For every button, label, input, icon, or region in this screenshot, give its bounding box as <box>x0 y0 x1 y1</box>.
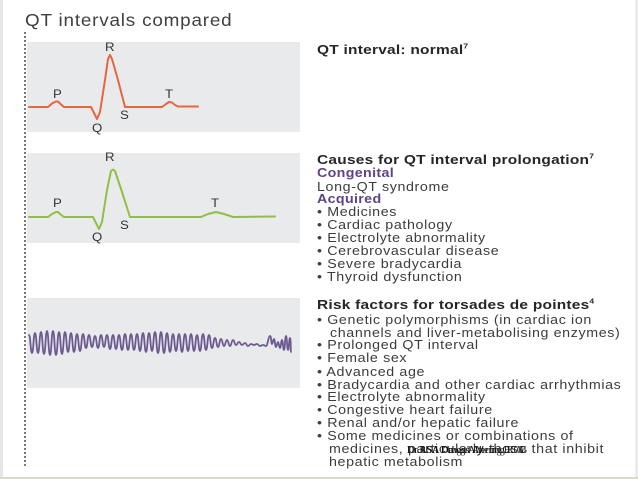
bottom page edge <box>0 477 638 479</box>
text block: risk factors: channels and liver-metabolising enzymes) <box>330 326 620 340</box>
label: normal S: S <box>120 108 129 122</box>
text block: causes: • Severe bradycardia <box>317 257 462 271</box>
heading: normal: QT interval: normal7 <box>317 42 468 57</box>
panel: torsades ECG <box>27 298 300 388</box>
watermark text 1: Dr.ASA Dawgs/Ahering ECG <box>407 445 527 456</box>
text block: causes: Acquired <box>317 192 381 206</box>
label: normal P: P <box>53 87 62 101</box>
text block: risk factors: • Renal and/or hepatic failure <box>317 416 519 430</box>
panel: prolonged ECG <box>27 153 300 243</box>
label: normal R: R <box>105 40 115 54</box>
text block: risk factors <box>317 297 621 469</box>
text block: risk factors: • Advanced age <box>317 365 425 379</box>
label: prolonged T: T <box>211 196 219 210</box>
text block: risk factors: medicines, particularly those that inhibit <box>329 442 604 456</box>
text block: causes: • Thyroid dysfunction <box>317 270 462 284</box>
text block: risk factors: • Some medicines or combinations of <box>317 429 574 443</box>
panel: normal ECG <box>27 42 300 132</box>
text block: risk factors: • Female sex <box>317 351 407 365</box>
text block: causes: Causes for QT interval prolongation7 <box>317 152 594 167</box>
text block: causes: • Medicines <box>317 205 397 219</box>
right page edge <box>635 0 638 479</box>
text block: causes: • Cerebrovascular disease <box>317 244 499 258</box>
label: prolonged Q: Q <box>92 230 102 244</box>
label: prolonged P: P <box>53 196 62 210</box>
dotted vertical rule <box>24 32 26 466</box>
label: prolonged R: R <box>105 150 115 164</box>
label: normal T: T <box>165 87 173 101</box>
text block: risk factors: • Electrolyte abnormality <box>317 390 486 404</box>
text block: risk factors: • Genetic polymorphisms (in cardiac ion <box>317 313 592 327</box>
title: QT intervals compared <box>25 10 232 30</box>
text block: risk factors: hepatic metabolism <box>329 455 463 469</box>
left page edge <box>0 0 3 479</box>
text block: risk factors: • Bradycardia and other cardiac arrhythmias <box>317 378 621 392</box>
text block: causes: Long-QT syndrome <box>317 180 450 194</box>
text block: risk factors: • Prolonged QT interval <box>317 338 479 352</box>
label: prolonged S: S <box>120 218 129 232</box>
text block: causes: Congenital <box>317 166 394 180</box>
text block: causes <box>317 152 594 284</box>
label: normal Q: Q <box>92 121 102 135</box>
text block: risk factors: Risk factors for torsades de pointes4 <box>317 297 594 312</box>
text block: causes: • Cardiac pathology <box>317 218 453 232</box>
text block: risk factors: • Congestive heart failure <box>317 403 493 417</box>
watermark text 2: Dr.RSA Drugs/Altering ECG <box>407 445 524 456</box>
text block: causes: • Electrolyte abnormality <box>317 231 486 245</box>
